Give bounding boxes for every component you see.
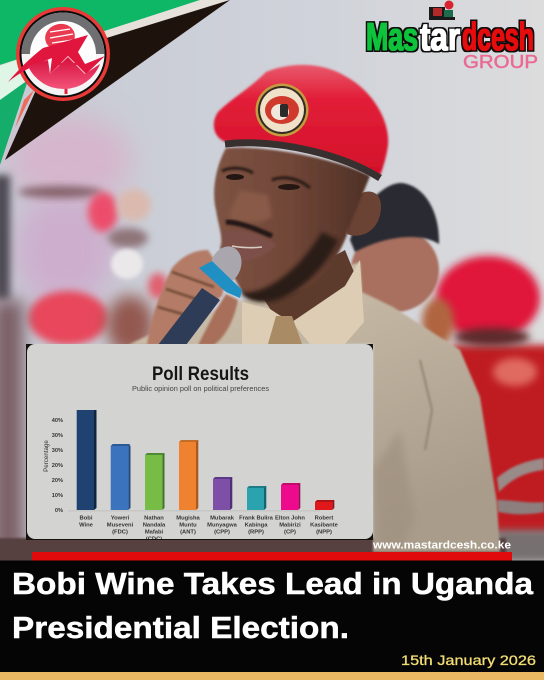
candidate labels: Frank Bulira (239, 515, 274, 521)
blurred crowd at left (0, 116, 168, 562)
chart subtitle: Public opinion poll on political preferences (132, 384, 269, 393)
logo wordmark: tar (420, 16, 460, 59)
website url: www.mastardcesh.co.ke (372, 540, 511, 552)
logo lightning M (8, 35, 105, 82)
speaker in red beret (128, 65, 500, 552)
headline (12, 566, 534, 645)
logo microphone (42, 21, 78, 94)
candidate labels: (CP) (284, 529, 296, 535)
y axis: 40% (52, 418, 63, 424)
logo wordmark: Mas (366, 16, 418, 59)
logo lower arc (28, 57, 100, 89)
bars (77, 410, 334, 510)
beret band (225, 143, 380, 178)
ear (347, 192, 381, 236)
candidate labels: (FDC) (112, 529, 128, 535)
candidate labels: Munyagwa (207, 522, 238, 528)
left round logo (8, 7, 110, 101)
blurred crowd at right (350, 183, 544, 562)
candidate labels: Kasibante (310, 522, 339, 528)
red divider bar (32, 552, 512, 560)
Mastardcesh Group logo (366, 0, 538, 72)
hand fingers (147, 250, 226, 345)
candidate labels: Yoweri (111, 515, 130, 521)
y axis: 30% (52, 448, 63, 454)
candidate labels: Mubarak (210, 515, 235, 521)
candidate labels: Nandala (143, 522, 166, 528)
candidate labels: Mafabi (145, 529, 164, 535)
headline: Presidential Election. (12, 610, 349, 645)
beret (214, 65, 388, 176)
microphone (158, 242, 247, 345)
logo camera icon (429, 0, 455, 20)
candidate labels: Mugisha (176, 515, 201, 521)
candidate labels: Kabinga (245, 522, 268, 528)
headline: Bobi Wine Takes Lead in Uganda (12, 566, 534, 601)
candidate labels: Muntu (179, 522, 197, 528)
candidate labels: Nathan (144, 515, 164, 521)
headline band (0, 560, 544, 672)
beard (240, 232, 338, 302)
y axis: 30% (52, 433, 63, 439)
bottom textured strip (0, 672, 544, 680)
candidate labels: (CPP) (214, 529, 230, 535)
y axis (43, 418, 63, 514)
y axis: 10% (52, 493, 63, 499)
candidate labels: Wine (79, 522, 94, 528)
candidate labels: (RPP) (248, 529, 264, 535)
collar and tie (242, 260, 364, 344)
logo subtitle: GROUP (463, 52, 538, 72)
y axis: Percentage (43, 440, 50, 472)
candidate labels: (ANT) (180, 529, 196, 535)
finger creases (158, 272, 214, 318)
candidate labels: Elton John (275, 515, 305, 521)
darker lower photo strip (0, 538, 506, 564)
candidate labels: Museveni (107, 522, 134, 528)
candidate labels: (CDC) (146, 536, 162, 542)
brows, eyes and mouth (222, 168, 310, 261)
shirt (128, 262, 500, 552)
date: 15th January 2026 (401, 652, 536, 668)
y axis: 0% (55, 508, 63, 514)
candidate labels: (NPP) (316, 529, 332, 535)
chart title: Poll Results (152, 364, 249, 385)
neck (262, 250, 358, 322)
y axis: 20% (52, 478, 63, 484)
candidate labels: Bobi (80, 515, 93, 521)
logo wordmark (366, 16, 534, 59)
face (214, 148, 370, 300)
y axis: 20% (52, 463, 63, 469)
poll chart panel (26, 344, 373, 542)
candidate labels: Robert (315, 515, 333, 521)
left corner stripes (0, 0, 230, 165)
hand thumb (198, 294, 238, 345)
beret badge (256, 84, 308, 136)
candidate labels (79, 516, 338, 539)
candidate labels: Mabirizi (279, 522, 301, 528)
